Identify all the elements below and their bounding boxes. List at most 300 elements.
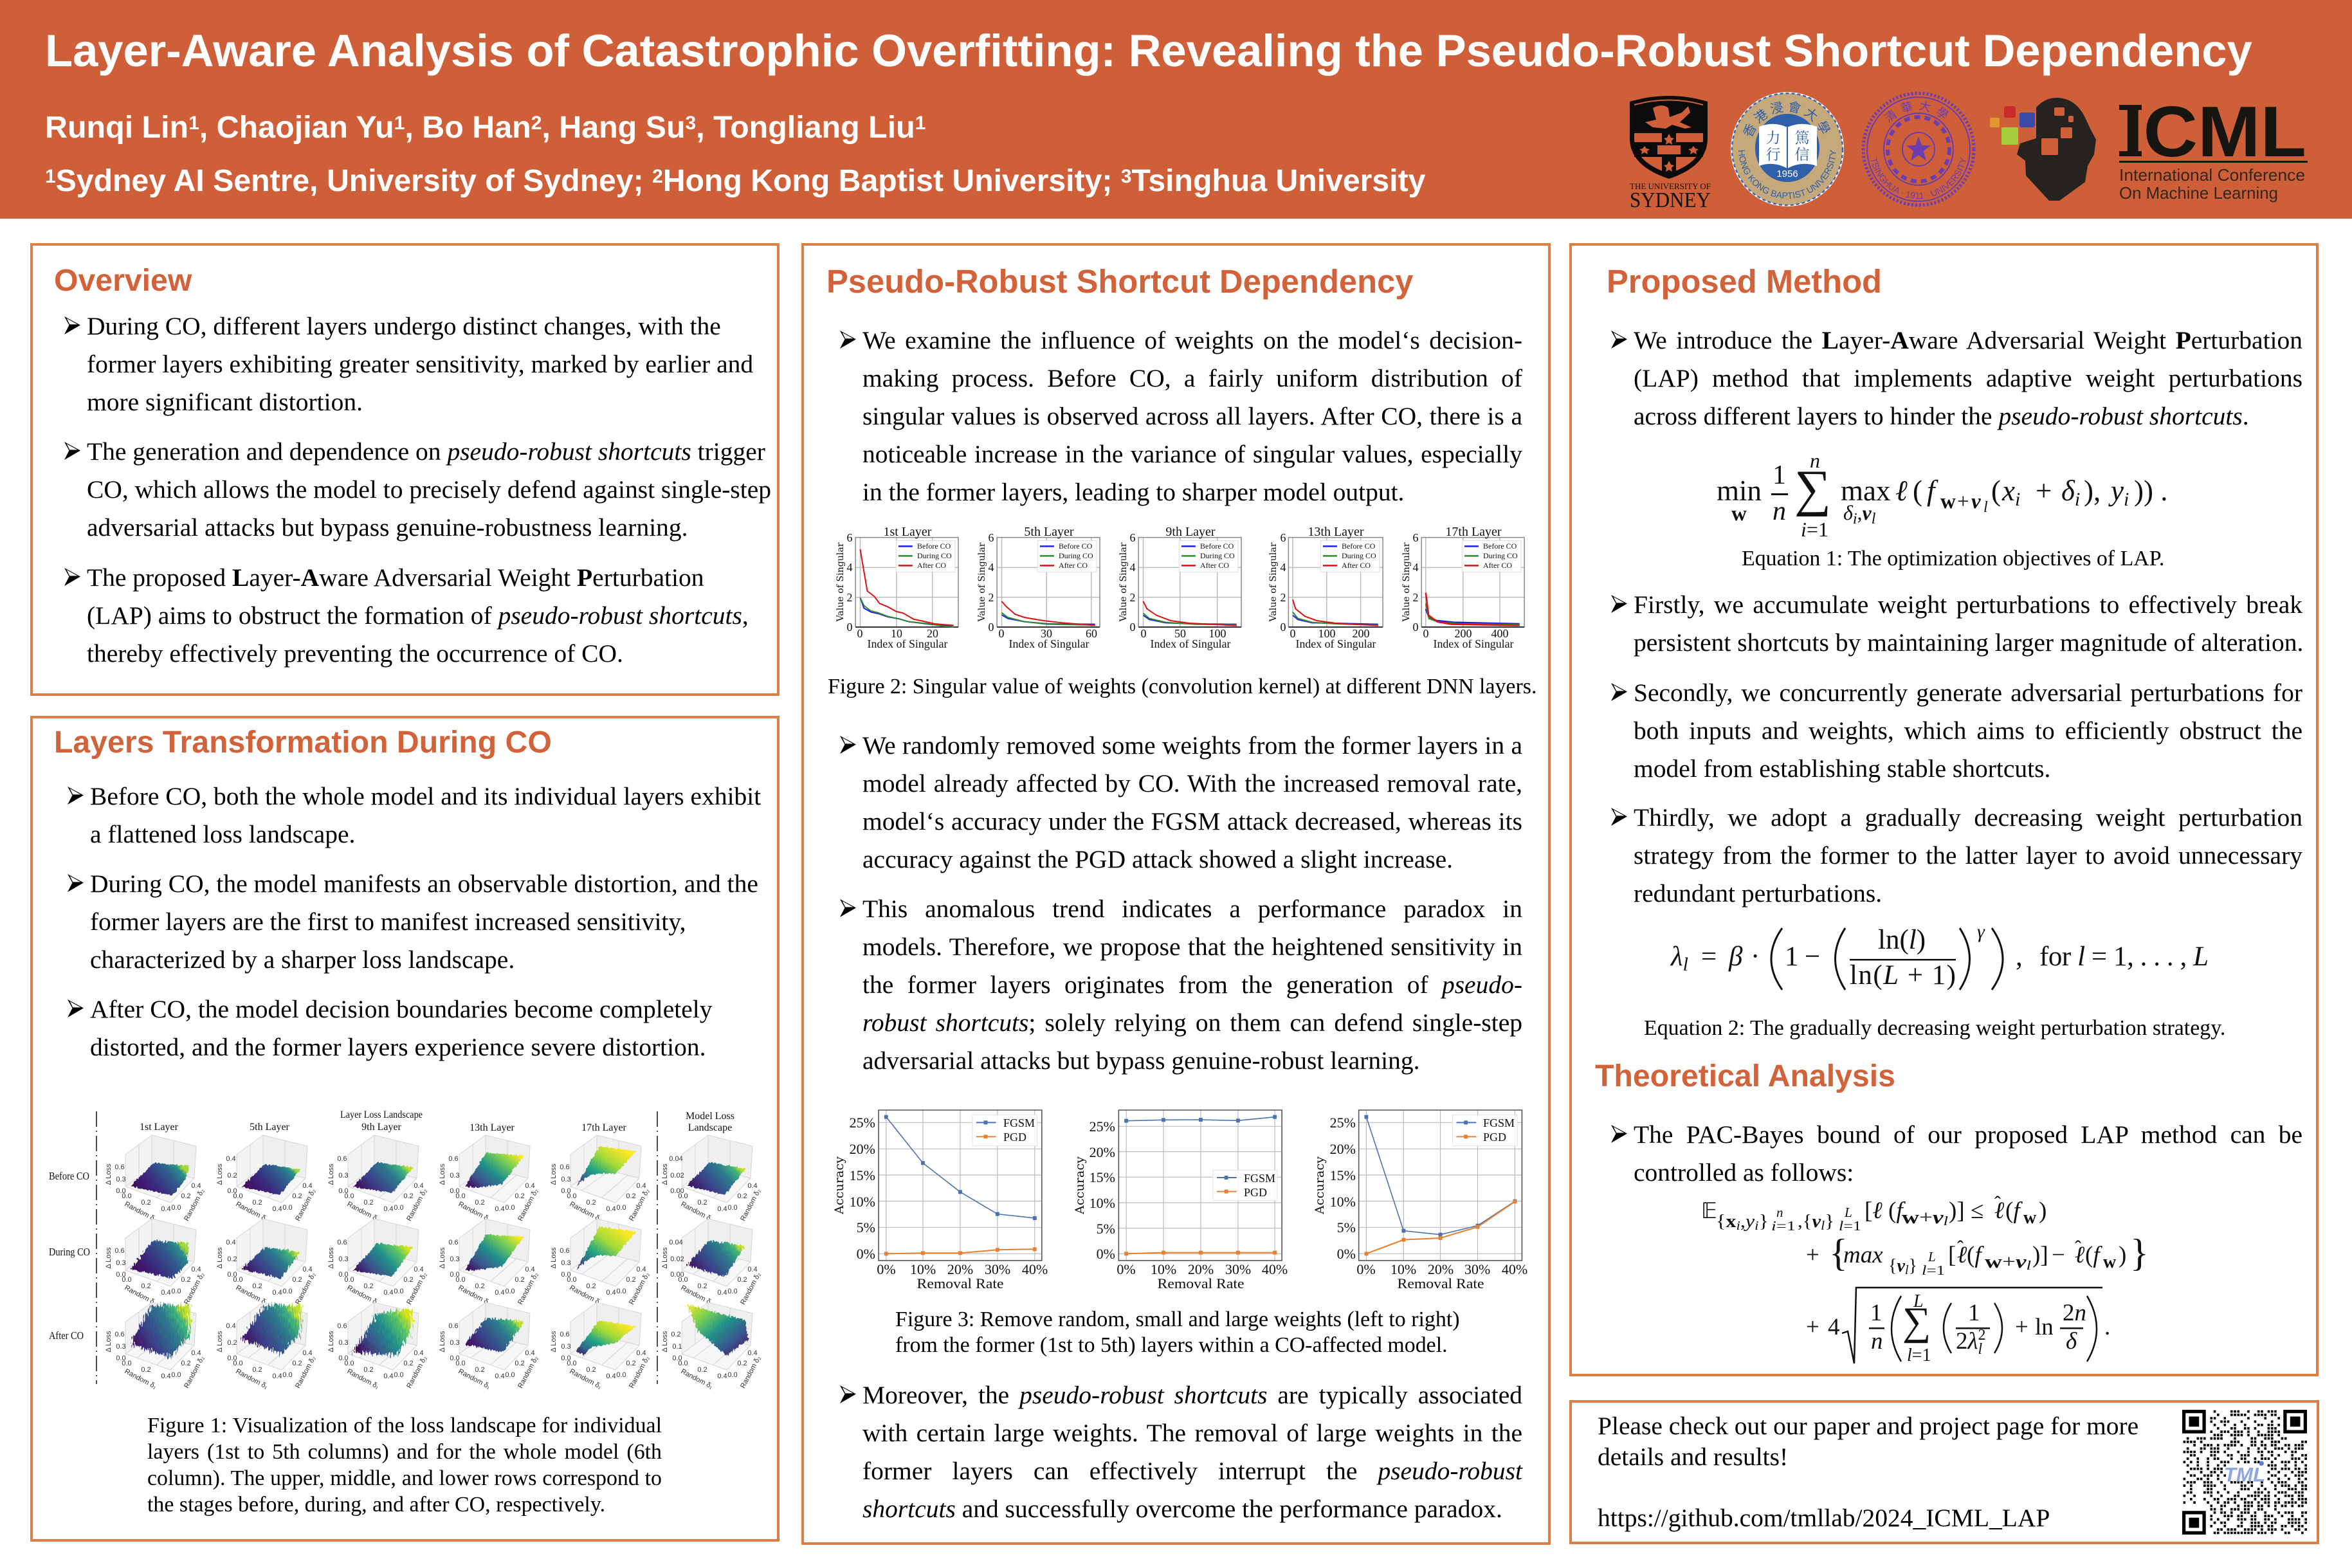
chart: 1st layer: Before CO — [917, 542, 951, 551]
bullet: removed weights experiment: model already affected by CO. With the increased removal rate, — [862, 769, 1522, 798]
equation 3: PAC-Bayes bound: w — [2103, 1252, 2117, 1272]
surface: 13th layer after CO: 0.4 — [525, 1349, 535, 1357]
surface: 1st layer before CO: 0.2 — [181, 1192, 191, 1200]
surface: 17th layer before CO: 0.3 — [561, 1176, 571, 1183]
surface: model before CO: Δ Loss — [661, 1163, 669, 1185]
surface: 13th layer after CO: 0.2 — [515, 1360, 525, 1367]
figure 1 caption: the stages before, during, and after CO, respectively. — [147, 1493, 605, 1517]
equation 2: β — [1728, 942, 1743, 972]
surface: 5th layer after CO: 0.0 — [282, 1371, 293, 1379]
equation 1: ν — [1971, 490, 1981, 513]
surface: model during CO: 0.4 — [717, 1289, 727, 1297]
logo: Tsinghua University: TSINGHUA · 1911 · UNIVERSITY — [1871, 157, 1966, 199]
logo: University of Sydney — [1630, 96, 1711, 212]
equation 3: PAC-Bayes bound: i=1 — [1771, 1218, 1796, 1234]
chart: small weights removal: PGD — [1244, 1186, 1267, 1199]
equation 3: PAC-Bayes bound: ˆ — [2075, 1237, 2081, 1258]
bullet: removed weights experiment: accuracy against the PGD attack showed a slight increase. — [862, 845, 1453, 873]
chart: small weights removal: 25% — [1089, 1118, 1115, 1135]
surface: 13th layer before CO: 0.4 — [525, 1182, 535, 1190]
link text: Please check out our paper and project page for more — [1598, 1412, 2138, 1440]
surface: 17th layer after CO: 0.0 — [567, 1360, 577, 1367]
surface: 9th layer after CO: 0.0 — [338, 1354, 349, 1362]
bullet: pseudo-robust shortcuts trigger CO: The generation and dependence on pseudo-robust shortcuts trigger — [87, 437, 765, 466]
equation 2: · — [1751, 942, 1760, 972]
surface: 1st layer after CO: Δ Loss — [105, 1331, 113, 1353]
chart: random weights removal: 0% — [857, 1246, 875, 1262]
chart: 13th layer: 4 — [1280, 561, 1286, 574]
equation 1: n — [1810, 449, 1820, 472]
surface: model during CO: 0.0 — [678, 1276, 688, 1284]
bullet: large weights association: Moreover, the pseudo-robust shortcuts are typically associated — [862, 1381, 1522, 1409]
equation 1: w — [1940, 490, 1956, 513]
surface: 17th layer before CO: Δ Loss — [550, 1163, 558, 1185]
chart: small weights removal: 15% — [1089, 1169, 1115, 1185]
surface: 5th layer before CO: 0.0 — [227, 1187, 237, 1195]
surface: 9th layer during CO — [327, 1219, 429, 1308]
surface: 5th layer during CO: 0.2 — [227, 1255, 237, 1263]
surface: 5th layer before CO: 0.2 — [227, 1172, 237, 1180]
surface: 17th layer during CO: 0.0 — [616, 1288, 626, 1295]
surface: 9th layer after CO: Δ Loss — [327, 1331, 335, 1353]
panel: layers transformation — [32, 717, 778, 1540]
chart: small weights removal: 30% — [1225, 1261, 1251, 1277]
surface: 9th layer after CO: 0.2 — [403, 1360, 414, 1367]
surface: 9th layer after CO: 0.4 — [414, 1349, 424, 1357]
surface: model before CO: 0.04 — [669, 1155, 683, 1163]
equation 3: PAC-Bayes bound: L — [1913, 1291, 1924, 1311]
chart: 13th layer: 100 — [1318, 627, 1335, 640]
chart: random weights removal: Accuracy — [832, 1156, 846, 1215]
surface: 9th layer before CO: 0.0 — [338, 1187, 349, 1195]
surface: 13th layer during CO: 0.4 — [525, 1266, 535, 1273]
surface: 5th layer during CO: 0.4 — [226, 1239, 236, 1246]
equation 3: PAC-Bayes bound: 2 — [1978, 1327, 1986, 1344]
surface: 5th layer after CO: 0.4 — [272, 1372, 282, 1380]
equation 3: PAC-Bayes bound: } — [2130, 1232, 2149, 1274]
equation 3: PAC-Bayes bound: ˆ — [1957, 1237, 1964, 1258]
equation 2 caption: Equation 2: The gradually decreasing weight perturbation strategy. — [1644, 1016, 2225, 1040]
surface: 5th layer during CO: Random δ₁ — [235, 1284, 269, 1308]
chart: 1st layer: After CO — [917, 561, 946, 570]
surface: model during CO: 0.2 — [737, 1276, 747, 1284]
logo: Hong Kong Baptist University: 行 — [1766, 143, 1780, 164]
bullet: PAC-Bayes bound: The PAC-Bayes bound of our proposed LAP method can be — [1634, 1120, 2302, 1149]
surface: 17th layer before CO: 0.4 — [606, 1205, 616, 1213]
equation 3: PAC-Bayes bound — [1672, 1190, 2187, 1370]
surface: 5th layer after CO: 0.4 — [302, 1349, 313, 1357]
surface: 5th layer before CO: Δ Loss — [216, 1163, 224, 1185]
equation 2: λ — [1671, 942, 1683, 972]
heading: layers transformation: Layers Transformation During CO — [54, 725, 552, 760]
equation 3: PAC-Bayes bound: )] — [1949, 1198, 1965, 1224]
logo: ICML wordmark: International Conference — [2119, 165, 2305, 185]
surface: 5th layer during CO: 0.4 — [302, 1266, 313, 1273]
equation 3: PAC-Bayes bound: [ℓ (f — [1864, 1198, 1906, 1224]
heading: theoretical analysis: Theoretical Analysis — [1595, 1059, 1895, 1093]
surface: 13th layer before CO: 0.0 — [455, 1192, 466, 1200]
surface: model before CO: Random δ₁ — [680, 1200, 715, 1224]
surface: model during CO: Δ Loss — [661, 1247, 669, 1269]
bullet: concurrently generate — [1611, 674, 2302, 788]
equation 3: PAC-Bayes bound: {x — [1716, 1212, 1735, 1232]
bullet: influence of weights: noticeable increase in the variance of singular values, especially — [862, 440, 1522, 468]
chart: 9th layer: 100 — [1209, 627, 1226, 640]
equation 1: , — [1857, 501, 1863, 524]
chart: 9th layer — [1118, 525, 1241, 650]
figure 1 caption — [147, 1412, 662, 1518]
surface: 5th layer during CO: Random δ₂ — [294, 1271, 318, 1306]
surface: 13th layer during CO: Random δ₂ — [516, 1271, 540, 1306]
equation 1: )) . — [2134, 475, 2167, 507]
chart: large weights removal: 20% — [1330, 1141, 1356, 1157]
surface: model after CO: 0.0 — [672, 1354, 682, 1362]
chart: 1st layer: Index of Singular — [867, 637, 948, 650]
equation 3: PAC-Bayes bound: l — [1978, 1341, 1983, 1358]
link text: details and results! — [1598, 1442, 1788, 1470]
surface: model before CO: 0.4 — [717, 1205, 727, 1213]
chart: 13th layer: 6 — [1280, 531, 1286, 544]
equation 2: l — [1683, 954, 1688, 975]
surface: 1st layer after CO: 0.0 — [171, 1371, 181, 1379]
surface: 5th layer before CO: 0.4 — [226, 1155, 236, 1163]
surface: 5th layer during CO: 0.0 — [227, 1271, 237, 1279]
surface: 9th layer during CO: 0.2 — [403, 1276, 414, 1284]
bullet: performance paradox: the former layers originates from the generation of pseudo- — [862, 971, 1522, 999]
chart: 17th layer: Index of Singular — [1433, 637, 1514, 650]
surface: model before CO: 0.2 — [697, 1199, 707, 1207]
surface: 1st layer during CO: 0.4 — [191, 1266, 201, 1273]
equation 3: PAC-Bayes bound: n — [1776, 1205, 1783, 1220]
equation 3: PAC-Bayes bound: l=1 — [1907, 1345, 1931, 1365]
surface: 17th layer after CO: 0.4 — [606, 1372, 616, 1380]
equation 3: PAC-Bayes bound: ,{ν — [1798, 1212, 1820, 1232]
surface: 5th layer after CO — [216, 1302, 318, 1391]
surface: 17th layer during CO: Random δ₂ — [628, 1271, 652, 1306]
equation 1: i — [2124, 489, 2129, 510]
column headings: Layer Loss Landscape — [340, 1109, 423, 1120]
chart: 13th layer: Index of Singular — [1295, 637, 1376, 650]
equation 1 — [1595, 450, 2302, 543]
equation 3: PAC-Bayes bound: i — [1736, 1219, 1740, 1233]
equation 1: ℓ — [1895, 475, 1908, 507]
bullet: concurrently generate: model from establishing stable shortcuts. — [1634, 754, 2050, 783]
surface: 9th layer before CO: 0.0 — [344, 1192, 354, 1200]
surface: 5th layer after CO: 0.2 — [227, 1339, 237, 1347]
surface: 5th layer before CO: 0.4 — [302, 1182, 313, 1190]
equation 3: PAC-Bayes bound: { — [1829, 1232, 1848, 1274]
chart: small weights removal: FGSM — [1244, 1172, 1275, 1185]
chart: small weights removal: 5% — [1097, 1221, 1115, 1237]
logo: Hong Kong Baptist University: 信 — [1794, 143, 1810, 164]
equation 1: ν — [1863, 501, 1872, 524]
equation 3: PAC-Bayes bound: − — [2052, 1242, 2065, 1268]
logo: Hong Kong Baptist University: 篤 — [1794, 126, 1810, 147]
surface: 13th layer during CO — [439, 1219, 540, 1308]
chart: 9th layer: Before CO — [1200, 542, 1234, 551]
chart: large weights removal: Removal Rate — [1397, 1275, 1484, 1291]
surface: 13th layer during CO: 0.4 — [495, 1289, 505, 1297]
surface: 1st layer after CO — [105, 1302, 206, 1391]
bullet: influence of weights: in the former layers, leading to sharper model output. — [862, 478, 1404, 506]
surface: 9th layer during CO: 0.2 — [363, 1282, 374, 1290]
surface: model after CO: Random δ₂ — [739, 1354, 763, 1390]
surface: model after CO: 0.4 — [717, 1372, 727, 1380]
bullet: performance paradox — [840, 895, 1522, 1075]
affiliations: 1Sydney AI Sentre, University of Sydney; 2Hong Kong Baptist University; 3Tsinghua University — [45, 163, 1425, 198]
surface: 17th layer before CO: 0.6 — [560, 1163, 570, 1171]
surface: model after CO: Δ Loss — [661, 1331, 669, 1353]
surface: 5th layer before CO: 0.2 — [252, 1199, 262, 1207]
chart: 13th layer: Before CO — [1342, 542, 1376, 551]
surface: model after CO: 0.2 — [737, 1360, 747, 1367]
bullet: distinct layer changes: former layers exhibiting greater sensitivity, marked by earlier and — [87, 350, 753, 378]
surface: 1st layer after CO: 0.4 — [161, 1372, 171, 1380]
surface: 17th layer before CO: 0.4 — [636, 1182, 646, 1190]
surface: 1st layer during CO: 0.0 — [171, 1288, 181, 1295]
surface: 1st layer during CO: 0.4 — [161, 1289, 171, 1297]
chart: 13th layer: 13th Layer — [1308, 525, 1364, 539]
chart: 17th layer: 6 — [1412, 531, 1419, 544]
chart: 13th layer: 200 — [1352, 627, 1370, 640]
equation 3: PAC-Bayes bound: 2λ — [1956, 1328, 1978, 1354]
surface: 17th layer during CO: 0.6 — [560, 1247, 570, 1255]
bullet: gradually decreasing: Thirdly, we adopt a gradually decreasing weight perturbation — [1634, 803, 2302, 832]
logos row — [1608, 84, 2352, 212]
surface: 9th layer during CO: Δ Loss — [327, 1247, 335, 1269]
equation 3: PAC-Bayes bound: l=1 — [1839, 1218, 1861, 1234]
surface: 5th layer after CO: 0.2 — [252, 1366, 262, 1374]
equation 3: PAC-Bayes bound: w+ν — [1985, 1252, 2023, 1272]
surface: model before CO: 0.02 — [670, 1172, 684, 1180]
chart: small weights removal: 20% — [1089, 1144, 1115, 1160]
chart: large weights removal: Accuracy — [1313, 1156, 1327, 1215]
equation 3: PAC-Bayes bound: l — [1905, 1263, 1909, 1277]
surface: 17th layer during CO: 0.4 — [606, 1289, 616, 1297]
surface: 13th layer before CO: 0.2 — [475, 1199, 485, 1207]
chart: 1st layer: 10 — [891, 627, 902, 640]
bullet: before CO — [68, 782, 761, 848]
equation 3: PAC-Bayes bound: δ — [2066, 1328, 2077, 1354]
surface: 9th layer during CO: 0.3 — [338, 1255, 349, 1263]
surface: 9th layer before CO: 0.4 — [414, 1182, 424, 1190]
row labels — [49, 1170, 90, 1342]
bullet: after CO: distorted, and the former layers experience severe distortion. — [90, 1033, 706, 1061]
equation 1: ), — [2084, 475, 2101, 507]
surface: 5th layer during CO: Δ Loss — [216, 1247, 224, 1269]
surface: 9th layer during CO: 0.0 — [344, 1276, 354, 1284]
chart: 17th layer: 0 — [1412, 621, 1419, 634]
equation 1: min — [1717, 475, 1762, 507]
equation 3: PAC-Bayes bound: ln — [2035, 1314, 2054, 1340]
row labels: After CO — [49, 1329, 84, 1342]
logo: Hong Kong Baptist University: 力 — [1766, 126, 1780, 147]
surface: model during CO: Random δ₁ — [680, 1284, 715, 1308]
surface: 17th layer during CO: Δ Loss — [550, 1247, 558, 1269]
chart: 17th layer: Before CO — [1483, 542, 1517, 551]
surface: 13th layer before CO: Random δ₂ — [516, 1187, 540, 1223]
chart: 1st layer: 4 — [846, 561, 853, 574]
equation 3: PAC-Bayes bound: l — [1821, 1219, 1825, 1233]
surface: 1st layer before CO: 0.4 — [191, 1182, 201, 1190]
surface: 9th layer before CO: 0.4 — [383, 1205, 394, 1213]
surface: 13th layer after CO: 0.3 — [450, 1339, 460, 1347]
surface: 17th layer after CO: 0.2 — [626, 1360, 636, 1367]
bullet: LAP intro: (LAP) method that implements adaptive weight perturbations — [1634, 364, 2302, 392]
surface: 17th layer after CO: 0.0 — [561, 1354, 571, 1362]
figure 3 caption: from the former (1st to 5th) layers within a CO-affected model. — [895, 1333, 1448, 1357]
surface: 17th layer during CO: 0.0 — [561, 1271, 571, 1279]
surface: 1st layer before CO: 0.6 — [114, 1163, 125, 1171]
chart: 5th layer: Before CO — [1059, 542, 1093, 551]
chart: large weights removal: PGD — [1483, 1131, 1506, 1144]
surface: 9th layer during CO: 0.6 — [337, 1239, 347, 1246]
surface: 17th layer before CO: 0.2 — [626, 1192, 636, 1200]
column headings: 1st Layer — [140, 1122, 179, 1133]
column headings: 9th Layer — [361, 1122, 402, 1133]
surface: 5th layer after CO: Random δ₂ — [294, 1354, 318, 1390]
surface: model during CO: 0.00 — [670, 1271, 684, 1279]
surface: 1st layer before CO — [105, 1135, 206, 1224]
equation 3: PAC-Bayes bound: 2n — [2063, 1300, 2086, 1326]
bullet: large weights association: former layers can effectively interrupt the pseudo-robust — [862, 1457, 1522, 1485]
heading: pseudo-robust shortcut dependency: Pseudo-Robust Shortcut Dependency — [826, 263, 1413, 300]
bullet: accumulate perturbations: persistent shortcuts by maintaining larger magnitude of alteration. — [1634, 628, 2303, 657]
logo: ICML head — [1990, 98, 2096, 201]
chart: 9th layer: 4 — [1129, 561, 1136, 574]
equation 2 — [1595, 920, 2302, 1000]
bullet: pseudo-robust shortcuts trigger CO: CO, which allows the model to precisely defend against single-step — [87, 475, 771, 504]
chart: large weights removal: 5% — [1337, 1219, 1356, 1235]
surface: 17th layer before CO — [550, 1135, 652, 1224]
chart: 13th layer — [1268, 525, 1383, 650]
logo: ICML wordmark — [2119, 92, 2308, 203]
surface: 1st layer before CO: 0.0 — [122, 1192, 132, 1200]
chart: 5th layer: Value of Singular — [977, 542, 987, 623]
surface: 17th layer during CO: Random δ₁ — [569, 1284, 603, 1308]
surface: 17th layer after CO: Random δ₁ — [569, 1367, 603, 1391]
chart: 5th layer: 4 — [988, 561, 994, 574]
equation 2: ln(l) — [1878, 925, 1926, 955]
surface: 1st layer after CO: Random δ₂ — [183, 1354, 206, 1390]
logo: University of Sydney: SYDNEY — [1630, 188, 1711, 212]
equation 1: f — [1927, 475, 1938, 507]
chart: 1st layer: 20 — [927, 627, 938, 640]
surface: model during CO: 0.0 — [727, 1288, 738, 1295]
surface: 9th layer before CO: 0.6 — [337, 1155, 347, 1163]
bullet: pseudo-robust shortcuts trigger CO — [64, 437, 771, 542]
surface: 9th layer before CO — [327, 1135, 429, 1224]
equation 2: 1 — [1785, 942, 1798, 972]
surface: 1st layer during CO — [105, 1219, 206, 1308]
surface: 1st layer during CO: Δ Loss — [105, 1247, 113, 1269]
surface: model after CO: 0.0 — [678, 1360, 688, 1367]
surface: 1st layer after CO: 0.2 — [181, 1360, 191, 1367]
surface: 13th layer before CO: 0.2 — [515, 1192, 525, 1200]
equation 3: PAC-Bayes bound: w — [2023, 1208, 2037, 1228]
chart: 9th layer: Value of Singular — [1118, 542, 1129, 623]
logo: Tsinghua University: 清華大學 — [1884, 100, 1949, 123]
chart: random weights removal: Removal Rate — [917, 1275, 1003, 1291]
surface: model before CO — [661, 1135, 763, 1224]
chart: small weights removal: 10% — [1151, 1261, 1176, 1277]
chart: large weights removal: 10% — [1330, 1194, 1356, 1210]
equation 3: PAC-Bayes bound: L — [1928, 1249, 1936, 1264]
bullet: during CO — [68, 870, 758, 974]
surface: model after CO: Random δ₁ — [680, 1367, 715, 1391]
chart: random weights removal: FGSM — [1003, 1117, 1035, 1129]
surface: 1st layer after CO: 0.4 — [191, 1349, 201, 1357]
chart: 9th layer: 0 — [1129, 621, 1136, 634]
logo: Tsinghua University — [1863, 93, 1974, 205]
stage separators — [96, 1111, 657, 1384]
bullet: after CO — [68, 995, 713, 1061]
chart: small weights removal: Accuracy — [1073, 1156, 1087, 1215]
equation 3: PAC-Bayes bound: max — [1843, 1242, 1883, 1268]
chart: 1st layer: 2 — [846, 591, 853, 604]
surface: model before CO: 0.4 — [747, 1182, 758, 1190]
chart: 17th layer: During CO — [1483, 551, 1518, 560]
chart: random weights removal: 5% — [857, 1219, 875, 1235]
equation 1: l — [1983, 499, 1988, 516]
chart: small weights removal: Removal Rate — [1158, 1275, 1244, 1291]
bullet: accumulate perturbations — [1611, 590, 2303, 657]
equation 3: PAC-Bayes bound: 1 — [1968, 1300, 1980, 1326]
equation 3: PAC-Bayes bound: 4 — [1828, 1314, 1839, 1340]
surface: model during CO: 0.2 — [697, 1282, 707, 1290]
surface: 9th layer before CO: Random δ₁ — [346, 1200, 381, 1224]
surface: 1st layer during CO: 0.3 — [116, 1259, 126, 1267]
surface: 1st layer before CO: Δ Loss — [105, 1163, 113, 1185]
equation 2: for l = 1, . . . , L — [2039, 942, 2209, 972]
bullet: proposed LAP: The proposed Layer-Aware Adversarial Weight Perturbation — [87, 563, 704, 592]
bullet: PAC-Bayes bound — [1611, 1116, 2302, 1192]
chart: random weights removal: 20% — [850, 1141, 875, 1157]
bullet: performance paradox: This anomalous trend indicates a performance paradox in — [862, 895, 1522, 923]
surface: 13th layer after CO: Random δ₁ — [457, 1367, 492, 1391]
logo: ICML wordmark: On Machine Learning — [2119, 183, 2278, 203]
equation 3: PAC-Bayes bound: [ — [1948, 1242, 1956, 1268]
surface: 9th layer during CO: Random δ₁ — [346, 1284, 381, 1308]
column headings: 13th Layer — [469, 1122, 515, 1133]
chart: small weights removal — [1073, 1110, 1288, 1291]
logo: Hong Kong Baptist University: 1956 — [1776, 169, 1798, 179]
equation 3: PAC-Bayes bound: {ν — [1888, 1256, 1905, 1276]
equation 3: PAC-Bayes bound: } — [1825, 1212, 1834, 1232]
equation 3: PAC-Bayes bound: . — [2104, 1314, 2110, 1340]
surface: 1st layer after CO: 0.0 — [122, 1360, 132, 1367]
chart: small weights removal: 0% — [1097, 1246, 1115, 1262]
column headings — [140, 1109, 734, 1133]
surface: 13th layer during CO: 0.0 — [455, 1276, 466, 1284]
surface: 13th layer after CO: 0.0 — [450, 1354, 460, 1362]
surface: model after CO: 0.2 — [671, 1331, 681, 1338]
surface: 17th layer after CO: 0.3 — [561, 1343, 571, 1351]
equation 3: PAC-Bayes bound: ℓ — [1994, 1198, 2005, 1224]
QR code — [2182, 1410, 2307, 1535]
surface: 13th layer before CO — [439, 1135, 540, 1224]
surface: 9th layer before CO: 0.2 — [403, 1192, 414, 1200]
surface: 17th layer during CO: 0.4 — [636, 1266, 646, 1273]
title: Layer-Aware Analysis of Catastrophic Overfitting: Revealing the Pseudo-Robust Shortcut Dependency — [45, 25, 2252, 76]
surface: 5th layer before CO: Random δ₁ — [235, 1200, 269, 1224]
surface: 17th layer after CO: Δ Loss — [550, 1331, 558, 1353]
figure 2 caption: Figure 2: Singular value of weights (convolution kernel) at different DNN layers. — [828, 675, 1536, 698]
equation 1: 1 — [1773, 460, 1786, 490]
surface: 1st layer after CO: 0.2 — [141, 1366, 151, 1374]
panel: paper link and QR — [1571, 1401, 2318, 1543]
bullet: accumulate perturbations: Firstly, we accumulate weight perturbations to effectively break — [1634, 590, 2302, 619]
